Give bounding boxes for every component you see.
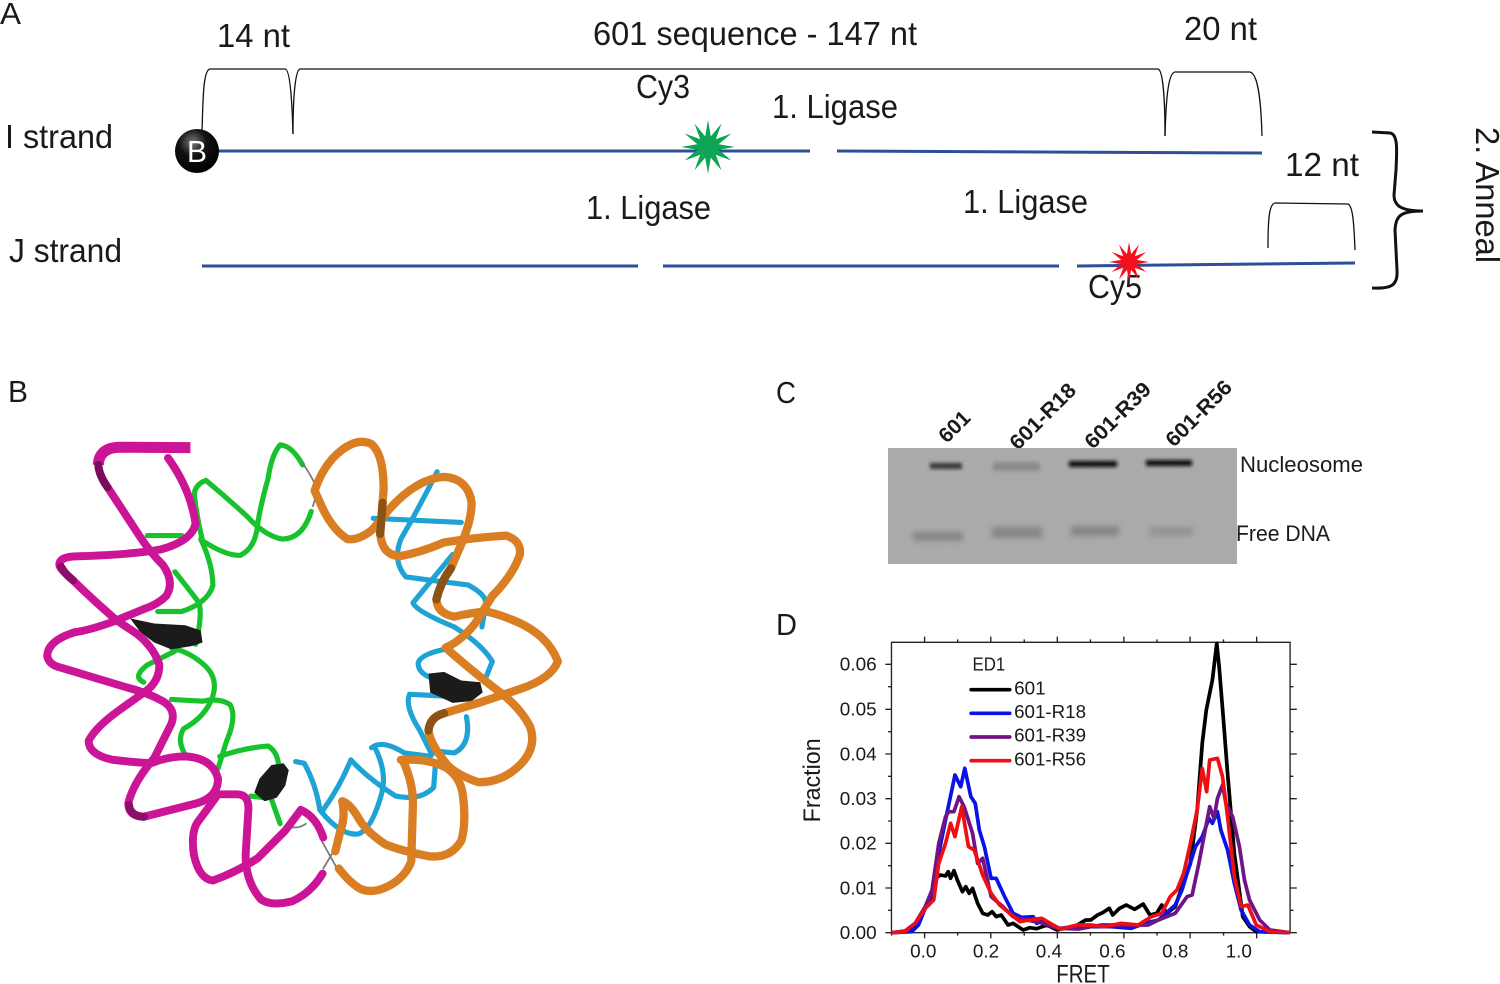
y axis tick labels: 0.04 [840,743,877,764]
curly brace for anneal [1372,132,1423,288]
lane labels [934,376,1237,455]
label first ligase: 1. Ligase [772,88,898,125]
label Cy3: Cy3 [636,68,690,105]
black binding sites [130,618,483,801]
lane labels: 601-R39 [1080,378,1156,454]
label second ligase: 1. Ligase [586,189,711,226]
I strand DNA lines [202,151,1262,153]
x axis tick labels: 0.4 [1036,941,1062,962]
lane labels: 601-R56 [1161,376,1237,452]
blue inner strand [296,472,492,834]
label 20 nt: 20 nt [1184,10,1257,47]
x axis tick labels: 0.2 [973,941,999,962]
y axis tick labels: 0.06 [840,654,877,675]
label 12 nt: 12 nt [1285,146,1359,183]
panel letter B: B [8,374,28,409]
x axis tick labels [910,941,1252,962]
brackets above I strand [202,69,1262,136]
series 601-R18 [891,768,1290,933]
panel A: ligation scheme [0,0,1500,305]
icon: biotin bead: B [187,134,207,169]
legend: 601-R18 [1014,701,1086,722]
DNA ribbon model [47,442,558,903]
nucleosome bands [930,460,1192,471]
line chart [799,637,1297,984]
label Free DNA: Free DNA [1236,521,1330,546]
J strand DNA lines [202,263,1355,266]
y axis tick labels: 0.01 [840,877,877,898]
label Nucleosome: Nucleosome [1240,452,1363,477]
label 601 sequence: 601 sequence - 147 nt [593,15,917,52]
panel D: FRET histogram [776,607,1297,984]
panel B: nucleosome DNA ribbon model [8,374,558,903]
gel blot [888,448,1237,564]
legend: 601-R39 [1014,725,1086,746]
label Cy5: Cy5 [1088,268,1142,305]
y axis tick labels: 0.03 [840,788,877,809]
x axis tick labels: 1.0 [1226,941,1252,962]
grey linker segments [289,463,337,868]
icon: Cy3 green star [681,120,735,174]
x axis tick labels: 0.6 [1099,941,1126,962]
panel letter D: D [776,607,797,642]
legend: 601 [1014,677,1046,698]
magenta outer strand [47,447,323,903]
y axis tick labels: 0.00 [840,922,877,943]
y axis tick labels: 0.05 [840,699,877,720]
label third ligase: 1. Ligase [963,183,1088,220]
legend [971,654,1086,769]
label J strand: J strand [9,232,122,269]
label 14 nt: 14 nt [217,17,290,54]
series 601-R39 [891,785,1290,933]
free DNA bands [913,526,1193,541]
series 601 [891,643,1290,933]
x axis tick labels: 0.0 [910,941,936,962]
legend: ED1 [973,654,1005,675]
green inner strand [139,445,311,824]
label I strand: I strand [5,118,113,155]
lane labels: 601-R18 [1005,379,1081,455]
legend: 601-R56 [1014,748,1086,769]
icon: Cy5 red star [1109,242,1149,282]
orange outer strand [315,442,558,891]
lane labels: 601 [934,406,976,448]
panel C: gel image [776,375,1363,564]
y axis title: Fraction [799,738,825,822]
y axis tick labels [840,654,877,943]
bracket above J strand overhang [1268,203,1355,250]
axes frame and ticks [885,637,1297,938]
icon: biotin bead [175,129,219,173]
x axis tick labels: 0.8 [1162,941,1188,962]
y axis tick labels: 0.02 [840,833,877,854]
series 601-R56 [891,758,1290,933]
panel letter C: C [776,375,796,410]
